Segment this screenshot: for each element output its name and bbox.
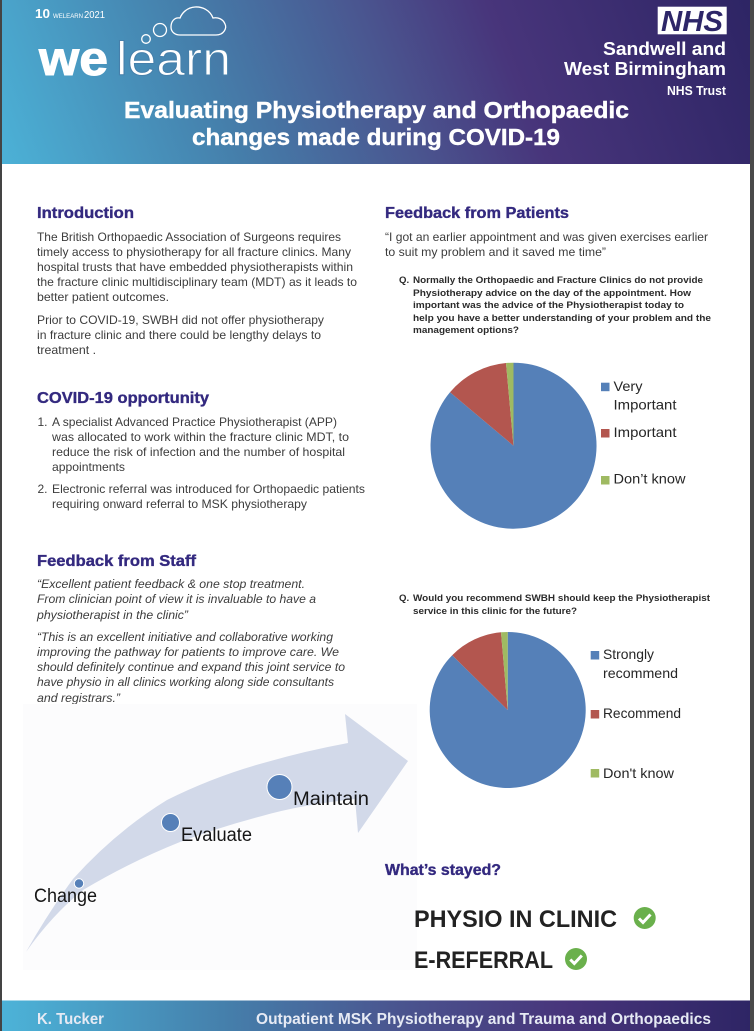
title: changes made during COVID-19 <box>192 124 560 150</box>
numbered list <box>38 415 365 511</box>
text block: introduction body: treatment . <box>37 343 96 357</box>
stage: maintain: Maintain <box>293 789 369 810</box>
text block: staff quotes: From clinician point of view it is invaluable to have a <box>37 592 316 606</box>
author: K. Tucker <box>37 1011 104 1028</box>
title: Evaluating Physiotherapy and Orthopaedic <box>124 97 629 123</box>
text block: staff quotes: improving the pathway for patients to improve care. We <box>37 645 339 659</box>
trust name <box>564 38 727 98</box>
question 2: Q. <box>399 593 409 604</box>
patient quote <box>385 230 708 259</box>
text block: introduction body: better patient outcomes. <box>37 290 169 304</box>
patient quote: “I got an earlier appointment and was given exercises earlier <box>385 230 708 244</box>
text block: introduction body: Prior to COVID-19, SWBH did not offer physiotherapy <box>37 313 324 327</box>
legend: pie chart 1: Very <box>614 378 642 394</box>
heading: COVID-19 opportunity: COVID-19 opportunity <box>37 390 209 407</box>
question 1: management options? <box>413 325 519 336</box>
text block: staff quotes <box>36 577 345 705</box>
trust name: NHS Trust <box>667 84 727 98</box>
text block: staff quotes: have physio in all clinics working along side consultants <box>37 675 334 689</box>
question 1: help you have a better understanding of your problem and the <box>413 313 711 324</box>
numbered list: appointments <box>52 460 125 474</box>
title <box>124 97 629 150</box>
question 1: Q. <box>399 275 409 286</box>
legend: pie chart 2: Strongly <box>603 646 654 662</box>
numbered list: requiring onward referral to MSK physiotherapy <box>52 497 307 511</box>
panel: feedback from patients <box>385 205 711 788</box>
stage: maintain <box>267 774 369 810</box>
text block: staff quotes: physiotherapist in the clinic” <box>36 608 189 622</box>
text block: introduction body: the fracture clinic multidisciplinary team (MDT) as it leads to <box>37 275 357 289</box>
numbered list: reduce the risk of infection and the number of hospital <box>52 445 345 459</box>
question 2: service in this clinic for the future? <box>413 606 577 617</box>
question 1 <box>399 275 711 336</box>
heading: introduction: Introduction <box>37 205 134 222</box>
arrow <box>26 714 408 952</box>
text block: staff quotes: “Excellent patient feedback & one stop treatment. <box>37 577 305 591</box>
legend: pie chart 1: Important <box>614 396 677 412</box>
legend: pie chart 2: Recommend <box>603 705 681 721</box>
heading: feedback from patients: Feedback from Patients <box>385 205 569 222</box>
issue label <box>35 7 105 21</box>
text block: introduction body: in fracture clinic and there could be lengthy delays to <box>37 328 321 342</box>
numbered list: 1. <box>38 415 48 429</box>
item: physio in clinic: PHYSIO IN CLINIC <box>414 906 617 933</box>
legend: pie chart 2 <box>591 646 681 781</box>
numbered list: A specialist Advanced Practice Physiotherapist (APP) <box>52 415 337 429</box>
issue label: 10 <box>35 7 50 21</box>
trust name: West Birmingham <box>564 58 726 79</box>
pie chart 1 <box>431 363 597 529</box>
text block: introduction body: timely access to physiotherapy for all fracture clinics. Many <box>37 245 351 259</box>
department: Outpatient MSK Physiotherapy and Trauma and Orthopaedics <box>256 1011 711 1028</box>
numbered list: was allocated to work within the fracture clinic MDT, to <box>51 430 349 444</box>
panel: change arrow diagram <box>23 704 417 970</box>
text block: staff quotes: and registrars.” <box>37 691 121 705</box>
header banner <box>2 0 750 164</box>
legend: pie chart 1: Don’t know <box>614 470 686 486</box>
question 2 <box>399 593 711 617</box>
heading: feedback from staff: Feedback from Staff <box>37 553 197 570</box>
question 1: important was the advice of the Physiotherapist today to <box>413 300 684 311</box>
trust name: Sandwell and <box>603 38 726 59</box>
stage: change: Change <box>34 886 97 907</box>
NHS logo: NHS <box>661 6 724 38</box>
welearn logo: learn <box>116 32 231 85</box>
text block: staff quotes: “This is an excellent initiative and collaborative working <box>37 630 333 644</box>
question 1: Normally the Orthopaedic and Fracture Clinics do not provide <box>413 275 703 286</box>
panel: what's stayed <box>385 862 656 974</box>
numbered list: Electronic referral was introduced for Orthopaedic patients <box>52 482 365 496</box>
panel: COVID-19 opportunity <box>37 390 365 511</box>
numbered list: 2. <box>38 482 48 496</box>
footer banner <box>2 1000 750 1031</box>
stage: evaluate <box>162 814 252 846</box>
welearn logo: we <box>38 33 108 86</box>
text block: introduction body: The British Orthopaedic Association of Surgeons requires <box>37 230 341 244</box>
pie chart 2 <box>430 632 586 788</box>
patient quote: to suit my problem and it saved me time” <box>385 245 606 259</box>
stage: evaluate: Evaluate <box>181 825 252 846</box>
welearn logo <box>38 7 231 86</box>
legend: pie chart 1 <box>601 378 686 486</box>
question 1: Physiotherapy advice on the day of the appointment. How <box>413 288 692 299</box>
panel: feedback from staff <box>36 553 345 705</box>
question 2: Would you recommend SWBH should keep the Physiotherapist <box>413 593 711 604</box>
panel: introduction <box>37 205 357 357</box>
issue label: WELEARN <box>53 14 83 20</box>
text block: staff quotes: should definitely continue and expand this joint service to <box>37 660 345 674</box>
legend: pie chart 2: Don't know <box>603 765 675 781</box>
legend: pie chart 1: Important <box>614 424 677 440</box>
text block: introduction body: hospital trusts that have embedded physiotherapists within <box>37 260 353 274</box>
issue label: 2021 <box>84 10 105 21</box>
heading: what's stayed: What’s stayed? <box>385 862 501 879</box>
legend: pie chart 2: recommend <box>603 665 678 681</box>
text block: introduction body <box>37 230 357 357</box>
item: e-referral: E-REFERRAL <box>414 947 553 974</box>
